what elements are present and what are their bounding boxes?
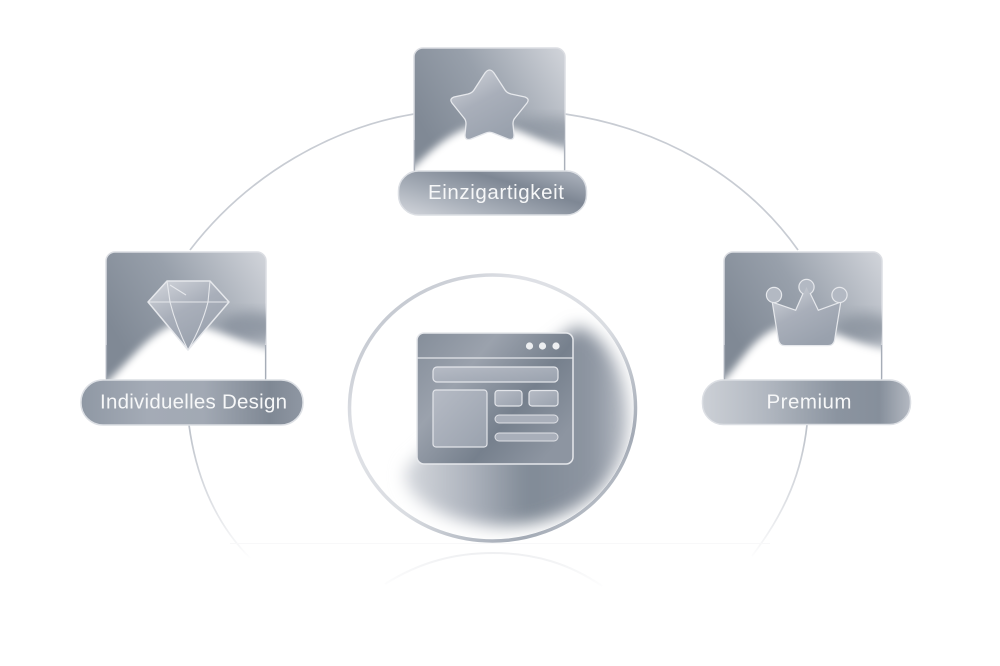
label pill: Premium <box>702 380 910 424</box>
browser window icon <box>417 333 573 464</box>
label pill: Individuelles Design: Individuelles Design <box>100 390 287 414</box>
card: diamond <box>105 251 267 380</box>
label pill: Einzigartigkeit: Einzigartigkeit <box>428 181 564 204</box>
icon: crown <box>767 280 846 345</box>
panel: Einzigartigkeit <box>398 48 600 215</box>
card: crown <box>723 251 883 380</box>
label pill: Einzigartigkeit <box>398 171 586 215</box>
reflection of central circle <box>230 543 770 586</box>
circle gray glow <box>405 326 628 526</box>
panel: Individuelles Design <box>81 252 303 425</box>
connecting ring arcs <box>189 114 807 558</box>
circle ring <box>350 275 636 541</box>
card: star <box>413 47 566 171</box>
icon: diamond <box>148 281 229 350</box>
icon: star <box>451 70 528 140</box>
central circle <box>350 275 636 541</box>
label pill: Individuelles Design <box>81 380 303 425</box>
label pill: Premium: Premium <box>766 390 852 414</box>
panel: Premium <box>702 252 910 424</box>
